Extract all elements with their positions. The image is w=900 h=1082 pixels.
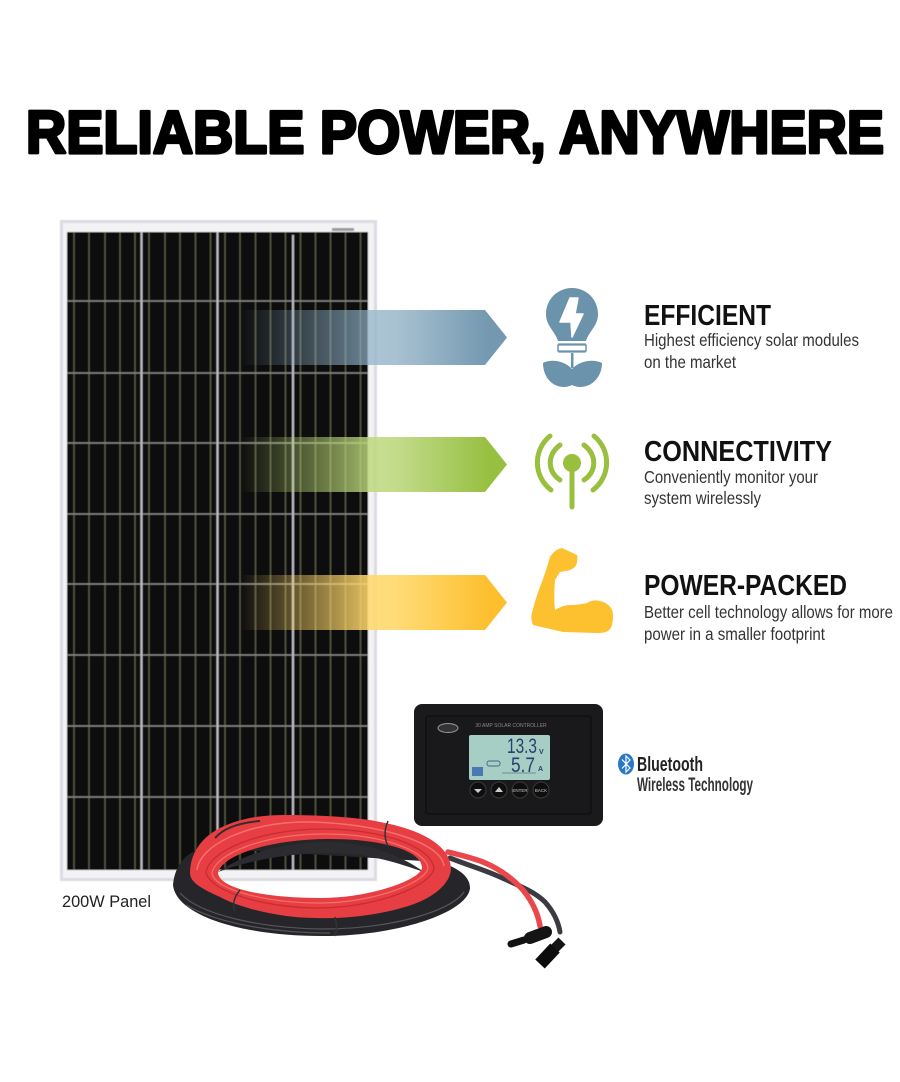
solar controller: A bbox=[538, 766, 543, 773]
text block: efficient bbox=[644, 300, 859, 372]
text block: efficient: EFFICIENT bbox=[644, 300, 771, 332]
solar panel bbox=[60, 220, 377, 881]
solar controller: 30 AMP SOLAR CONTROLLER bbox=[475, 723, 547, 729]
icon: flexed arm bbox=[531, 548, 613, 633]
icon: wireless antenna bbox=[537, 436, 607, 507]
text block: power-packed: power in a smaller footprint bbox=[644, 624, 825, 644]
arrow: power-packed bbox=[240, 575, 507, 630]
solar controller: ENTER bbox=[512, 788, 528, 793]
solar controller: 13.3 bbox=[507, 735, 537, 758]
text block: efficient: Highest efficiency solar modules bbox=[644, 330, 859, 350]
solar controller: V bbox=[539, 749, 544, 756]
text block: power-packed bbox=[644, 570, 893, 644]
text block: efficient: on the market bbox=[644, 352, 736, 372]
text block: connectivity: CONNECTIVITY bbox=[644, 436, 832, 468]
cable coil bbox=[173, 815, 470, 936]
text block: connectivity bbox=[644, 436, 832, 508]
arrow: connectivity bbox=[240, 437, 507, 492]
solar controller: BACK bbox=[535, 788, 547, 793]
cable connectors bbox=[511, 932, 562, 964]
bluetooth logo bbox=[618, 754, 753, 796]
bluetooth logo: Bluetooth bbox=[637, 754, 703, 776]
arrow: efficient bbox=[240, 310, 507, 365]
text block: connectivity: system wirelessly bbox=[644, 488, 761, 508]
cable tails bbox=[448, 852, 560, 932]
panel caption: 200W Panel bbox=[62, 893, 151, 911]
solar controller bbox=[414, 704, 603, 826]
text block: power-packed: POWER-PACKED bbox=[644, 570, 847, 602]
text block: connectivity: Conveniently monitor your bbox=[644, 467, 818, 487]
icon: light bulb with leaves bbox=[543, 288, 602, 387]
solar controller: 5.7 bbox=[511, 754, 535, 777]
bluetooth logo: Wireless Technology bbox=[637, 775, 753, 796]
